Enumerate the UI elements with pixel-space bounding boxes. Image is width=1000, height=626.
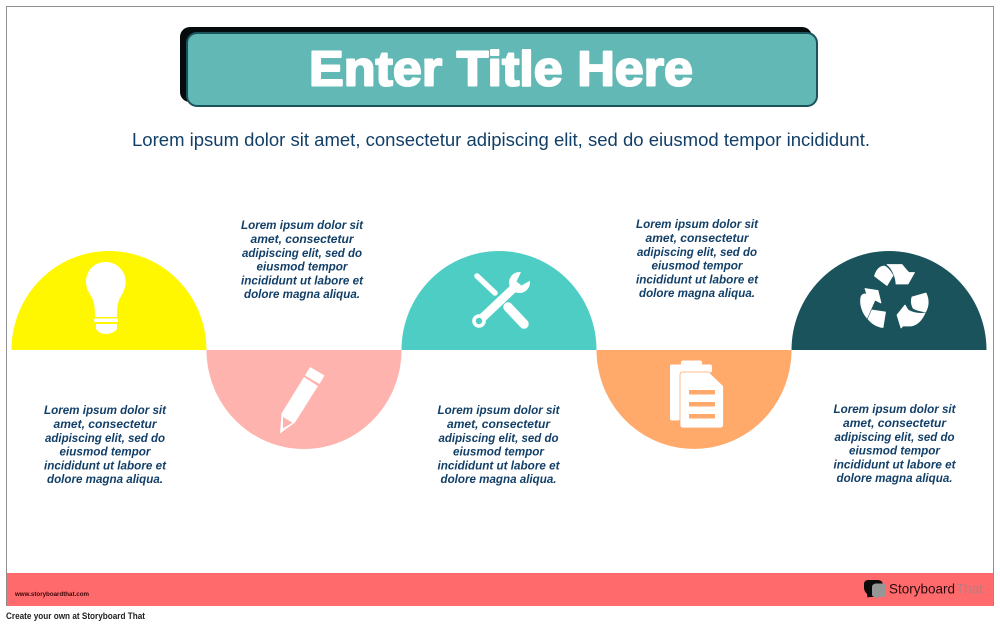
footer logo xyxy=(864,580,983,599)
step 2: pink semicircle with pencil xyxy=(206,350,402,449)
text block 3: amet, consectetur xyxy=(447,417,551,431)
text block 4: Lorem ipsum dolor sit xyxy=(636,217,759,231)
text block 1: dolore magna aliqua. xyxy=(47,472,163,486)
text block 5: amet, consectetur xyxy=(843,416,947,430)
text block 2: incididunt ut labore et xyxy=(241,274,364,288)
text block 3: dolore magna aliqua. xyxy=(440,472,556,486)
icon: wrench and screwdriver xyxy=(472,270,533,328)
text block 3: Lorem ipsum dolor sit xyxy=(438,403,560,417)
text block 5 xyxy=(834,402,956,485)
screwdriver tip xyxy=(477,276,495,293)
text block 5: incididunt ut labore et xyxy=(834,458,956,472)
screwdriver handle xyxy=(508,307,524,324)
text block 2: eiusmod tempor xyxy=(256,260,349,274)
footer url: www.storyboardthat.com xyxy=(14,591,89,598)
step 3: teal semicircle with tools xyxy=(402,251,596,350)
subtitle: Lorem ipsum dolor sit amet, consectetur adipiscing elit, sed do eiusmod tempor incididunt. xyxy=(132,130,870,150)
text block 4: incididunt ut labore et xyxy=(636,272,759,286)
text block 4: eiusmod tempor xyxy=(652,258,744,272)
icon: pencil xyxy=(280,367,324,434)
text block 1: amet, consectetur xyxy=(54,417,158,431)
title banner: Enter Title Here xyxy=(309,42,693,96)
icon: recycle symbol xyxy=(861,264,928,328)
text block 2: adipiscing elit, sed do xyxy=(242,246,362,260)
footer bar xyxy=(7,573,993,606)
text block 3: eiusmod tempor xyxy=(453,444,545,458)
wrench shaft xyxy=(479,286,516,321)
text block 2: amet, consectetur xyxy=(250,232,355,246)
text block 1: incididunt ut labore et xyxy=(44,458,167,472)
icon: light bulb xyxy=(86,262,126,334)
text block 4: adipiscing elit, sed do xyxy=(637,245,757,259)
text block 3 xyxy=(438,403,560,486)
text block 3: incididunt ut labore et xyxy=(438,458,560,472)
step 1: yellow semicircle with bulb xyxy=(12,251,206,350)
text block 1: adipiscing elit, sed do xyxy=(45,431,165,445)
text block 1: eiusmod tempor xyxy=(60,444,152,458)
text block 1 xyxy=(44,403,167,486)
text block 1: Lorem ipsum dolor sit xyxy=(44,403,167,417)
credit line: Create your own at Storyboard That xyxy=(6,611,145,621)
text block 5: eiusmod tempor xyxy=(849,444,941,458)
step 5: dark teal semicircle with recycle xyxy=(792,251,986,350)
text block 5: Lorem ipsum dolor sit xyxy=(834,402,956,416)
text block 4: amet, consectetur xyxy=(646,231,750,245)
footer logo: That xyxy=(956,580,983,596)
text block 4: dolore magna aliqua. xyxy=(639,286,755,300)
wrench ring xyxy=(472,314,486,328)
text block 5: dolore magna aliqua. xyxy=(836,471,952,485)
text block 2: dolore magna aliqua. xyxy=(244,287,360,301)
wrench head xyxy=(509,272,530,293)
footer logo: Storyboard xyxy=(889,580,955,596)
text block 2 xyxy=(241,218,364,301)
text block 3: adipiscing elit, sed do xyxy=(438,431,558,445)
step 4: orange semicircle with clipboard xyxy=(596,350,792,449)
text block 2: Lorem ipsum dolor sit xyxy=(241,218,364,232)
icon: clipboard document xyxy=(670,360,724,428)
title banner xyxy=(180,27,817,106)
text block 4 xyxy=(636,217,759,300)
text block 5: adipiscing elit, sed do xyxy=(834,430,954,444)
